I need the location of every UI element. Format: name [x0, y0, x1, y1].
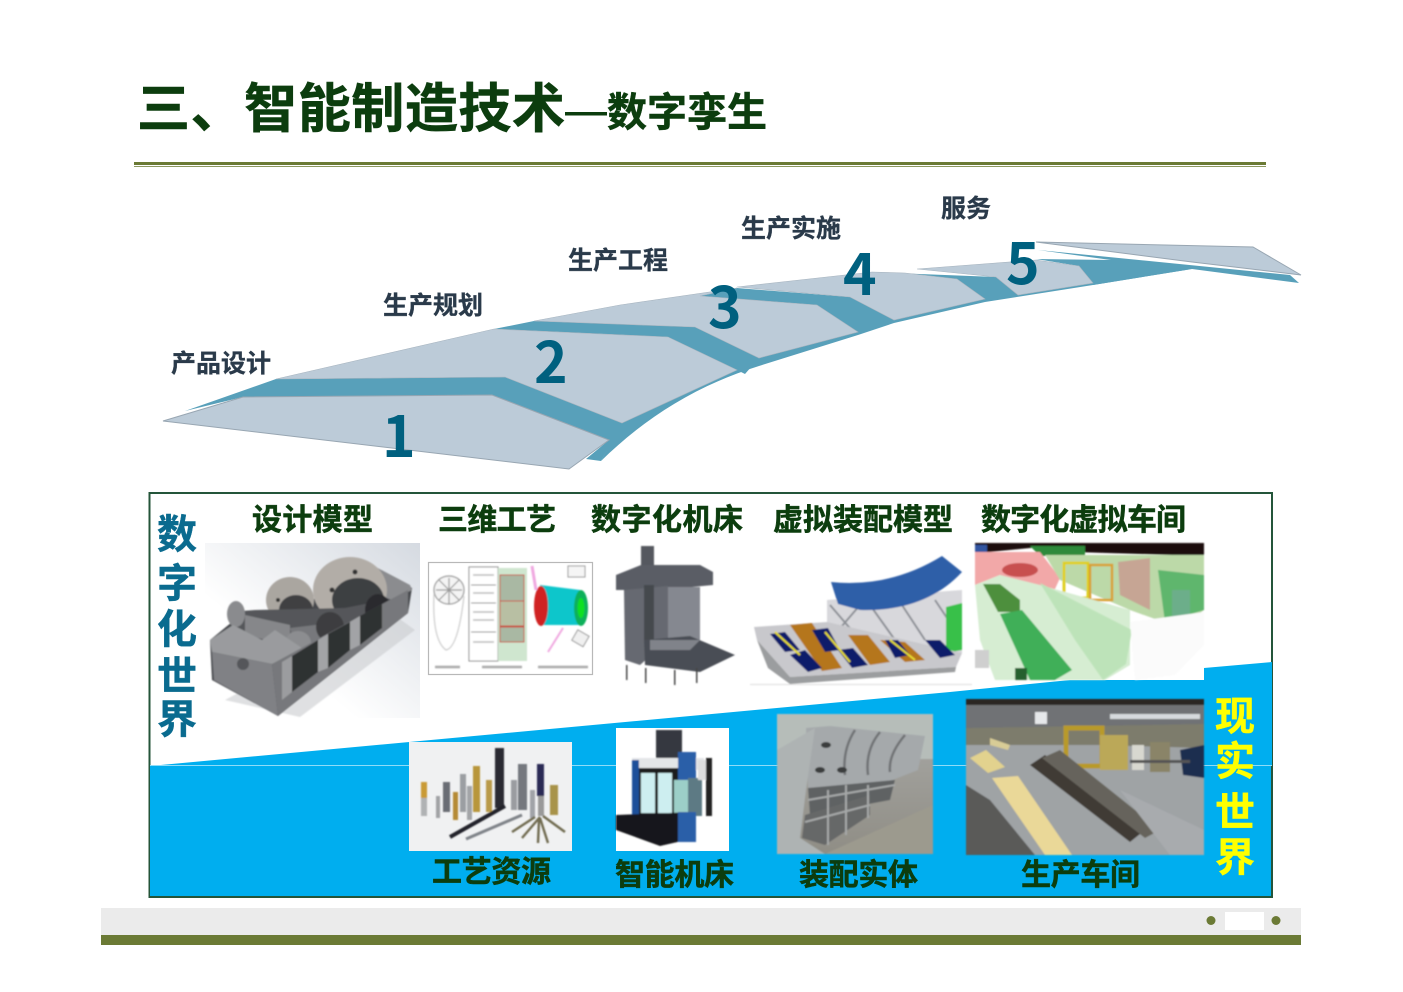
- top row headings: 数字化机床: [591, 495, 743, 539]
- image: cutting tools: [409, 742, 572, 851]
- left label: digital world: 数: [157, 502, 197, 560]
- bottom row headings: 装配实体: [799, 850, 918, 894]
- stage numbers: 2: [534, 318, 568, 400]
- top row headings: 三维工艺: [438, 495, 556, 539]
- ribbon segment 2: [276, 329, 737, 423]
- left label: digital world: [157, 502, 197, 745]
- stage numbers: 4: [843, 230, 877, 312]
- right label: real world: 界: [1215, 825, 1255, 883]
- title: [137, 67, 767, 143]
- bottom row headings: 生产车间: [1021, 850, 1140, 894]
- ribbon tail: [1036, 242, 1301, 275]
- image: 3D process diagram: [428, 562, 592, 674]
- left label: digital world: 界: [157, 687, 197, 745]
- top row headings: 设计模型: [252, 495, 373, 539]
- bottom row headings: 智能机床: [615, 850, 734, 894]
- footer bar: [101, 908, 1301, 945]
- stage numbers: [382, 219, 1040, 474]
- stage numbers: 3: [708, 263, 742, 345]
- stage numbers: 1: [382, 392, 416, 474]
- stage labels: 生产工程: [568, 241, 668, 277]
- ribbon: product lifecycle stages: [163, 242, 1301, 469]
- right label: real world: 实: [1215, 729, 1255, 787]
- ribbon segment 5: [917, 260, 1093, 295]
- image: physical assembly: [777, 714, 933, 854]
- left label: digital world: 世: [157, 644, 197, 702]
- footer page marker: [1206, 912, 1280, 930]
- stage numbers: 5: [1006, 219, 1040, 301]
- ribbon band: teal strips: [185, 250, 1299, 461]
- title rule: [134, 162, 1266, 167]
- image: gearbox design model: [205, 543, 420, 718]
- title: 三、智能制造技术: [137, 67, 565, 143]
- stage labels: 产品设计: [171, 344, 271, 380]
- top row headings: 虚拟装配模型: [773, 495, 953, 539]
- ribbon segment 4: [737, 272, 985, 320]
- title: 数字孪生: [607, 80, 767, 138]
- stage labels: [171, 189, 991, 380]
- top row headings: 数字化虚拟车间: [981, 495, 1186, 539]
- stage labels: 生产实施: [741, 209, 841, 245]
- image: smart machine tool: [616, 728, 729, 851]
- ribbon segment 1: [163, 395, 609, 469]
- image: digital virtual workshop: [975, 543, 1204, 680]
- stage labels: 生产规划: [383, 286, 483, 322]
- image: virtual assembly model: [750, 555, 972, 685]
- image: production workshop: [966, 699, 1204, 855]
- panel: digital and real worlds: [150, 493, 1272, 897]
- right label: real world: 世: [1215, 780, 1255, 838]
- left label: digital world: 字: [157, 551, 197, 609]
- right label: real world: [1215, 684, 1255, 883]
- panel frame: [150, 493, 1272, 897]
- right label: real world: 现: [1215, 684, 1255, 742]
- real world blue area: [150, 662, 1272, 896]
- stage labels: 服务: [941, 189, 991, 225]
- image: digital machine tool: [616, 546, 735, 685]
- bottom row headings: [432, 847, 1140, 894]
- bottom row headings: 工艺资源: [432, 847, 551, 891]
- ribbon segment 3: [534, 288, 858, 358]
- left label: digital world: 化: [157, 597, 197, 655]
- top row headings: [252, 495, 1186, 539]
